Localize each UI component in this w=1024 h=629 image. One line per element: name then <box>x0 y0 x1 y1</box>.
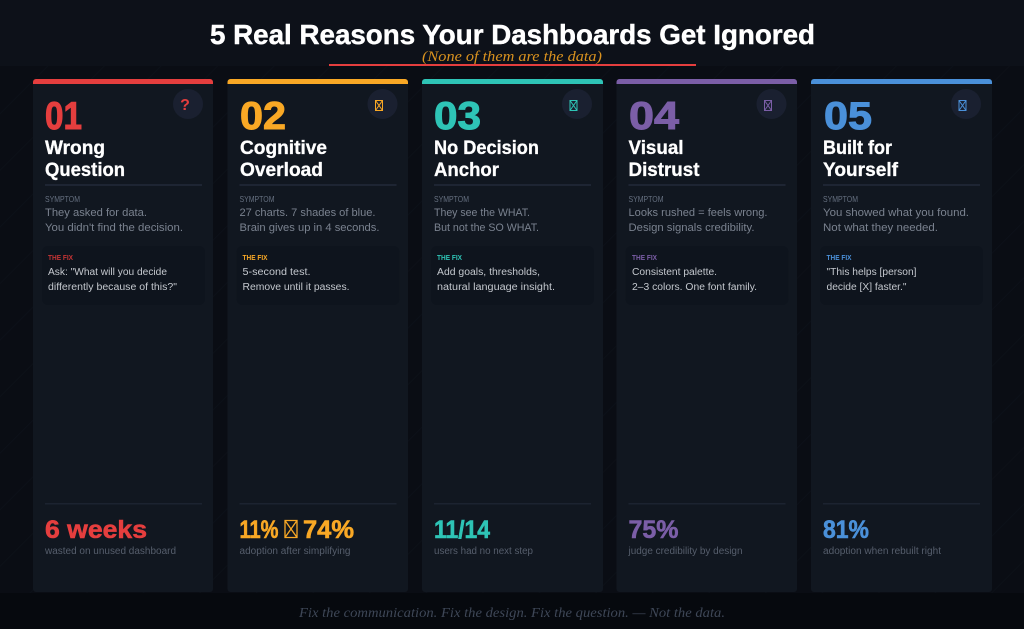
icon: question mark <box>173 89 203 119</box>
heading: No Decision <box>434 138 539 159</box>
heading <box>434 138 539 181</box>
symptom <box>823 195 969 234</box>
fix box: "This helps [person] <box>826 267 917 278</box>
symptom: Not what they needed. <box>823 222 938 234</box>
heading: Question <box>45 160 125 181</box>
heading <box>240 138 327 181</box>
symptom: SYMPTOM <box>45 195 80 204</box>
symptom <box>45 195 183 234</box>
fix box: 5-second test. <box>242 267 310 278</box>
panel: 03 no decision anchor <box>422 79 603 592</box>
heading: Yourself <box>823 160 899 181</box>
stat: 6 weeks <box>45 516 147 544</box>
number 04: 04 <box>629 95 679 138</box>
heading: Built for <box>823 138 893 159</box>
fix box: differently because of this?" <box>48 282 177 293</box>
fix box: Remove until it passes. <box>242 282 350 293</box>
fix box: natural language insight. <box>437 282 555 293</box>
title: 5 Real Reasons Your Dashboards Get Ignored <box>210 19 815 50</box>
number 01: 01 <box>45 95 82 138</box>
symptom: SYMPTOM <box>434 195 469 204</box>
fix box <box>626 246 788 305</box>
stat: 75% <box>628 516 678 544</box>
title underline <box>329 64 696 66</box>
symptom <box>628 195 768 234</box>
fix box <box>236 246 400 305</box>
symptom: 27 charts. 7 shades of blue. <box>240 207 376 219</box>
number 02: 02 <box>240 95 286 138</box>
panel: 02 cognitive overload <box>228 79 408 592</box>
stat: 11/14 <box>434 516 490 544</box>
stat: adoption after simplifying <box>240 546 350 557</box>
symptom: Looks rushed = feels wrong. <box>628 207 768 219</box>
panel: 05 built for yourself <box>811 79 992 592</box>
fix box: THE FIX <box>826 253 852 262</box>
icon: missing glyph box <box>756 89 786 119</box>
fix box: Consistent palette. <box>632 267 717 278</box>
heading <box>823 138 899 181</box>
fix box: 2–3 colors. One font family. <box>632 282 757 293</box>
stat: adoption when rebuilt right <box>823 546 941 557</box>
panel: 04 visual distrust <box>616 79 797 592</box>
fix box <box>431 246 594 305</box>
number 05: 05 <box>824 95 872 138</box>
heading: Anchor <box>434 160 500 181</box>
fix box <box>42 246 205 305</box>
symptom: SYMPTOM <box>240 195 275 204</box>
fix box: THE FIX <box>48 253 73 262</box>
footer tagline: Fix the communication. Fix the design. Fix the question. — Not the data. <box>298 606 725 621</box>
stat: 81% <box>823 516 869 544</box>
icon: question mark: ? <box>180 97 190 114</box>
symptom: They asked for data. <box>45 207 147 219</box>
number 03: 03 <box>434 95 481 138</box>
heading: Distrust <box>628 160 700 181</box>
heading: Visual <box>628 138 684 159</box>
symptom: SYMPTOM <box>823 195 858 204</box>
heading <box>45 138 125 181</box>
symptom: Brain gives up in 4 seconds. <box>240 222 380 234</box>
heading: Wrong <box>45 138 105 159</box>
symptom: But not the SO WHAT. <box>434 222 539 234</box>
subtitle: (None of them are the data) <box>422 49 602 65</box>
header band <box>0 0 1024 66</box>
icon: missing glyph box <box>951 89 981 119</box>
fix box <box>820 246 983 305</box>
symptom: SYMPTOM <box>628 195 664 204</box>
stat <box>823 516 941 557</box>
stat <box>628 516 742 557</box>
stat: 74% <box>303 516 354 544</box>
stat <box>240 516 354 557</box>
stat <box>434 516 533 557</box>
stat: users had no next step <box>434 546 533 557</box>
fix box: THE FIX <box>242 253 268 262</box>
panel: 01 wrong question <box>33 79 213 592</box>
heading <box>628 138 700 181</box>
stat: wasted on unused dashboard <box>44 546 176 557</box>
stat: judge credibility by design <box>628 546 742 557</box>
fix box: Ask: "What will you decide <box>48 267 167 278</box>
icon: missing glyph box <box>368 89 398 119</box>
symptom: They see the WHAT. <box>434 207 530 219</box>
stat <box>44 516 176 557</box>
heading: Overload <box>240 160 323 181</box>
fix box: Add goals, thresholds, <box>437 267 540 278</box>
icon: missing glyph box <box>562 89 592 119</box>
heading: Cognitive <box>240 138 327 159</box>
symptom: Design signals credibility. <box>628 222 754 234</box>
fix box: THE FIX <box>632 253 657 262</box>
fix box: decide [X] faster." <box>826 282 907 293</box>
fix box: THE FIX <box>437 253 462 262</box>
symptom <box>240 195 380 234</box>
stat: 11% <box>240 516 278 544</box>
symptom: You showed what you found. <box>823 207 969 219</box>
symptom: You didn't find the decision. <box>45 222 183 234</box>
symptom <box>434 195 539 234</box>
